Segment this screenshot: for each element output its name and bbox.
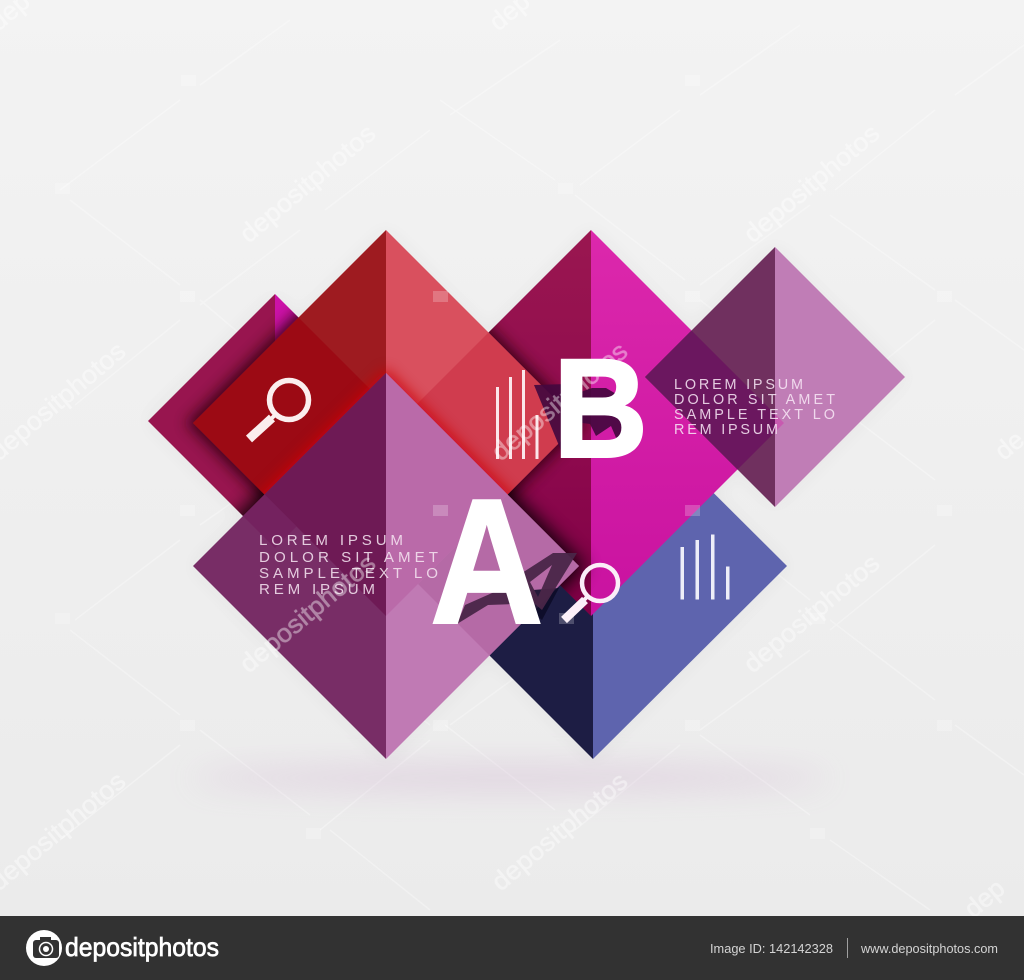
diamond: light purple B text panel [645, 247, 905, 507]
website: www.depositphotos.com [860, 941, 998, 956]
icon: bars on red [496, 370, 538, 459]
watermarks: dep [958, 873, 1010, 924]
watermarks: depositphotos [233, 548, 381, 679]
watermarks: depositphotos [737, 548, 885, 679]
text block B: SAMPLE TEXT LO [674, 407, 835, 423]
text block A: LOREM IPSUM [259, 532, 403, 549]
diamond: blue [400, 373, 787, 759]
text block B [674, 377, 835, 438]
letter A: A [430, 463, 543, 661]
icon: magnifier on magenta [564, 565, 618, 620]
letter B: B [554, 330, 648, 487]
text block A: REM IPSUM [259, 581, 375, 598]
letter A shadow [457, 553, 577, 624]
watermark camera marks [55, 75, 952, 839]
watermarks: depositphotos [485, 336, 633, 467]
text block B: DOLOR SIT AMET [674, 392, 835, 408]
depositphotos logo: depositphotos [65, 932, 219, 962]
footer bar [0, 916, 1024, 980]
letter B shadow [534, 384, 630, 456]
cast shadows on magenta diamonds [181, 307, 595, 597]
diamond: small magenta back [148, 294, 402, 548]
soft cast shadow of diamonds [148, 230, 905, 759]
image id: Image ID: 142142328 [710, 941, 833, 956]
watermarks: depositphotos [485, 766, 633, 897]
icon: magnifier on red [249, 380, 308, 439]
watermarks: depositphotos [737, 118, 885, 249]
diamond: red [193, 230, 579, 616]
text block B: LOREM IPSUM [674, 377, 803, 393]
depositphotos logo [26, 930, 219, 966]
text block B: REM IPSUM [674, 422, 778, 438]
text block A: SAMPLE TEXT LO [259, 565, 438, 582]
text block A [259, 532, 438, 598]
text block A: DOLOR SIT AMET [259, 549, 438, 566]
floor shadow [190, 767, 830, 789]
watermarks: depositphotos [233, 118, 381, 249]
icon: bars on blue [680, 534, 730, 600]
diamond: purple A [193, 373, 579, 759]
diamond: magenta B [398, 230, 784, 616]
glow of purple diamond on red [259, 364, 515, 494]
